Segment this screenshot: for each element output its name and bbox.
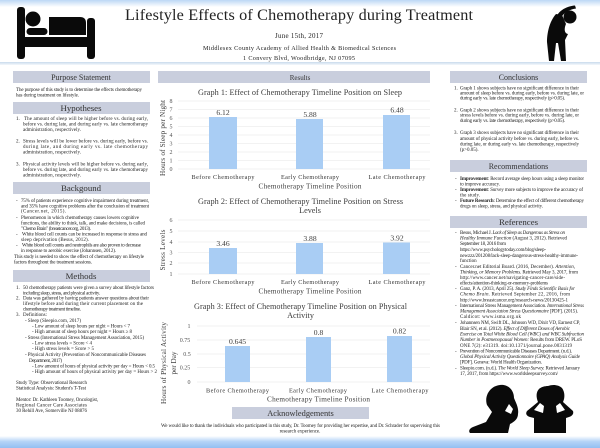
- chart: graph 2 stress: 3.46: [216, 239, 230, 248]
- text: references list: [455, 231, 584, 377]
- text: background list: functions, the ability to think, talk, and make decisions, is called: [21, 222, 146, 226]
- text: methods list: - Physical Activity (Prevention of Noncommunicable Diseases: [25, 353, 146, 358]
- chart: graph 1 sleep: 1: [170, 158, 172, 164]
- chart: graph 3 physical activity: Before Chemotherapy: [206, 388, 270, 394]
- chart: graph 3 physical activity: Early Chemotherapy: [289, 388, 348, 394]
- text: conclusions list: [454, 86, 584, 153]
- heading: methods: [13, 270, 150, 282]
- text: methods list: including sleep, stress, and physical activity.: [23, 292, 100, 296]
- panel: background: [13, 182, 150, 266]
- text: references list: 17, 2017, from https://www.worldsleepsurvey.com/: [460, 372, 559, 377]
- chart: graph 3 physical activity: per Day: [170, 351, 178, 374]
- text: conclusions list: Graph 2 shows subjects have no significant difference in their: [460, 108, 579, 114]
- text: background list: and 35% have cognitive problems after the conclusion of treatment: [21, 204, 150, 210]
- text: conclusions list: during late, or during early vs. late chemotherapy, respectively: [460, 142, 580, 148]
- chart: graph 2 stress: Graph 2: Effect of Chemotherapy Timeline Position on Stress: [198, 197, 403, 206]
- text: methods list: 3.: [16, 313, 20, 318]
- heading: acknowledgements: [232, 407, 369, 419]
- text: references list: Blair SN, et al. (2012). Effect of Different Doses of Aerobic: [460, 327, 571, 332]
- text: conclusions list: amount of sleep before vs. during early, before vs. during late, or: [460, 92, 584, 96]
- text: references list: [PDF]. Geneva: World Health Organization.: [460, 360, 542, 366]
- text: references list: -: [455, 321, 457, 326]
- chart: graph 1 sleep: Before Chemotherapy: [192, 174, 255, 181]
- text: methods list: lifestyle before and during their current placement on the: [23, 302, 144, 307]
- chart: graph 1 sleep: 6: [170, 116, 172, 122]
- chart: graph 3 physical activity: Chemotherapy Timeline Position: [267, 396, 370, 404]
- chart: graph 1 sleep: Late Chemotherapy: [368, 174, 426, 181]
- text: references list: Chemo Brain. Retrieved September 22, 2016, from: [460, 292, 570, 298]
- chart: graph 1 sleep: 4: [170, 133, 172, 139]
- text: references list: Johannsen NM, Swift DL, Johnson WD, Dixit VD, Earnest CP,: [460, 321, 580, 326]
- panel: recommendations: [450, 160, 587, 210]
- chart: graph 3 physical activity: [160, 302, 430, 404]
- chart: graph 1 sleep: 5: [170, 124, 172, 130]
- text: methods list: Mentor: Dr. Kathleen Toomey, Oncologist,: [16, 398, 98, 403]
- chart: graph 1 sleep: Graph 1: Effect of Chemotherapy Timeline Position on Sleep: [198, 88, 402, 97]
- text: recommendations list: Improvement: Survey more subjects to improve the accuracy of: [460, 188, 583, 193]
- text: conclusions list: during early vs. late chemotherapy, respectively (p>0.05).: [460, 96, 565, 102]
- text: methods list: chemotherapy treatment timeline.: [23, 308, 81, 312]
- text: hypotheses list: Physical activity levels will be higher before vs. during early,: [23, 162, 148, 168]
- text: hypotheses list: before vs. during late, and during early vs. late chemotherapy: [23, 122, 148, 128]
- text: hypotheses list: 1.: [16, 117, 20, 122]
- text: hypotheses list: 3.: [16, 162, 20, 168]
- text: background list: [14, 199, 150, 266]
- chart: graph 2 stress: Stress Levels: [159, 229, 167, 270]
- text: background list: sleep deprivation (Besus, 2012).: [21, 238, 89, 243]
- chart: graph 1 sleep: 6.48: [390, 106, 404, 114]
- text: background list: -: [16, 216, 18, 221]
- text: references list: -: [455, 231, 457, 236]
- text: methods list: - High amount of sleep hours per night = Hours ≥ 8: [32, 330, 132, 335]
- institution: Middlesex County Academy of Allied Health & Biomedical Sciences: [203, 45, 397, 52]
- text: background list: White blood cell counts can be increased in response to stress and: [22, 232, 148, 238]
- heading: acknowledgements: Acknowledgements: [267, 409, 334, 418]
- chart: graph 3 physical activity: 0.75: [180, 338, 190, 344]
- text: references list: Ganz, P. A. (2013, April 25). Study Finds Scientific Basis for: [460, 287, 575, 292]
- heading: background: Backgound: [61, 183, 102, 193]
- text: references list: Caldicot: www.isma.org.uk: [460, 315, 522, 320]
- chart: graph 2 stress: 3.92: [390, 234, 404, 242]
- text: hypotheses list: Stress levels will be lower before vs. during early, before vs.: [23, 140, 148, 144]
- institution: 1 Convery Blvd, Woodbridge, NJ 07095: [243, 55, 355, 62]
- chart: graph 1 sleep: 0: [170, 167, 172, 173]
- panel: hypotheses: [13, 102, 150, 178]
- chart: graph 3 physical activity: 0.25: [180, 366, 190, 372]
- text: acknowledgements: We would like to thank the individuals who participated in this study, Dr. Toomey for providing her expertise, and Dr. Schrader for supervising this: [161, 424, 440, 429]
- date: June 15th, 2017: [275, 32, 324, 40]
- text: methods list: Regional Cancer Care Associates: [16, 404, 87, 408]
- heading: purpose statement: Purpose Statement: [51, 73, 112, 82]
- chart: graph 1 sleep: 2: [170, 150, 172, 156]
- text: methods list: 1.: [16, 286, 20, 291]
- chart: graph 2 stress: 2: [170, 261, 172, 267]
- text: hypotheses list: The amount of sleep will be higher before vs. during early,: [24, 117, 148, 122]
- icon: bed: [17, 7, 95, 59]
- text: recommendations list: the study.: [460, 194, 480, 198]
- heading: references: [450, 216, 587, 228]
- text: references list: -: [455, 287, 457, 292]
- chart: graph 1 sleep: 3: [170, 142, 172, 148]
- chart: graph 1 sleep: 8: [170, 99, 172, 105]
- text: references list: -: [455, 265, 457, 270]
- text: background list: 75% of patients experience cognitive impairment during treatment,: [21, 199, 149, 204]
- text: recommendations list: [455, 177, 584, 210]
- text: acknowledgements: [161, 424, 440, 434]
- text: references list: effects/attention-thinking-or-memory-problems: [460, 282, 548, 286]
- text: references list: function: [460, 259, 477, 264]
- chart: graph 3 physical activity: Graph 3: Effect of Chemotherapy Timeline Position on Physical: [194, 302, 408, 311]
- text: references list: http://www.cancer.net/navigating-cancer-care/side-: [460, 276, 565, 281]
- chart: graph 3 physical activity: 1: [188, 324, 190, 330]
- text: hypotheses list: administration, respectively.: [23, 128, 81, 133]
- text: acknowledgements: research experience.: [280, 430, 320, 434]
- text: background list: -: [16, 244, 18, 248]
- text: references list: Prevention of Noncommunicable Diseases Department. (n.d.).: [460, 350, 572, 354]
- text: methods list: - Low amount of hours of physical activity per day = Hours < 0.5: [32, 364, 156, 370]
- text: references list: -: [455, 366, 457, 372]
- text: background list: -: [16, 232, 18, 238]
- text: methods list: 50 chemotherapy patients were given a survey about lifestyle factors: [23, 286, 154, 291]
- chart: graph 2 stress: Late Chemotherapy: [368, 279, 426, 286]
- text: methods list: Statistical Analysis: Student's T-Test: [16, 386, 87, 392]
- text: background list: (Cancer.net, 2015).: [21, 210, 66, 214]
- text: conclusions list: Graph 1 shows subjects have no significant difference in their: [460, 86, 579, 92]
- chart: graph 1 sleep: [159, 88, 430, 190]
- text: recommendations list: -: [455, 177, 457, 182]
- chart: graph 1 sleep: Early Chemotherapy: [281, 174, 340, 181]
- text: conclusions list: 2.: [454, 108, 458, 114]
- chart: graph 1 sleep: 5.88: [303, 110, 317, 119]
- text: hypotheses list: administration, respectively.: [23, 174, 81, 178]
- chart: graph 2 stress: 3.88: [303, 234, 317, 243]
- text: conclusions list: Graph 3 shows subjects have no significant difference in their: [460, 131, 579, 136]
- text: methods list: Definitions:: [23, 313, 47, 318]
- chart: graph 2 stress: 1: [170, 272, 172, 278]
- text: references list: Cancer.net Editorial Board. (2016, December). Attention,: [460, 265, 575, 270]
- chart: graph 2 stress: Chemotherapy Timeline Position: [258, 288, 362, 296]
- chart: graph 3 physical activity: Hours of Physical Activity: [160, 322, 168, 404]
- chart: graph 2 stress: 4: [170, 240, 172, 246]
- text: conclusions list: amount of physical activity before vs. during early, before vs.: [460, 137, 579, 142]
- text: methods list: Study Type: Observational Research: [16, 381, 88, 386]
- text: background list: -: [16, 199, 18, 204]
- text: references list: Healthy Immune Function (August 3, 2012). Retrieved: [459, 236, 568, 242]
- text: recommendations list: Future Research: Determine the effect of different chemotherapy: [460, 199, 584, 204]
- text: methods list: - Sleep (Sleepio.com, 2017): [25, 319, 81, 324]
- chart: graph 3 physical activity: Activity: [287, 311, 315, 320]
- panel: conclusions: [450, 71, 587, 153]
- panel: acknowledgements: [161, 407, 440, 434]
- text: hypotheses list: 2.: [16, 140, 20, 144]
- text: references list: https://www.psychologytoday.com/blog/sleep-: [460, 248, 546, 253]
- chart: graph 3 physical activity: 0.5: [183, 352, 191, 358]
- chart: graph 1 sleep: Chemotherapy Timeline Position: [258, 182, 362, 190]
- text: conclusions list: during early vs. late chemotherapy, respectively (p>0.05).: [460, 119, 565, 124]
- panel: purpose statement: [13, 71, 150, 98]
- text: hypotheses list: administration, respectively.: [23, 150, 81, 156]
- text: conclusions list: stress levels before vs. during early, before vs. during late, or: [460, 114, 579, 118]
- chart: graph 2 stress: Levels: [299, 206, 321, 215]
- heading: conclusions: Conclusions: [499, 73, 538, 82]
- heading: methods: Methods: [66, 271, 97, 281]
- text: background list: This study is needed to show the effect of chemotherapy on lifestyle: [14, 255, 145, 260]
- text: recommendations list: -: [455, 188, 457, 193]
- heading: references: References: [499, 217, 539, 227]
- chart: graph 3 physical activity: 0.645: [229, 337, 246, 346]
- chart: graph 2 stress: 3: [170, 250, 172, 256]
- text: methods list: 30 Rehill Ave, Somerville NJ 08876: [16, 409, 88, 414]
- text: background list: "Chemo Brain" (breastcancer.org, 2013).: [21, 227, 91, 232]
- chart: graph 1 sleep: Hours of Sleep per Night: [159, 100, 167, 176]
- text: references list: Number in Postmenopausal Women: Results from DREW. PLoS: [459, 338, 582, 343]
- text: recommendations list: Improvement: Record average sleep hours using a sleep monitor: [460, 177, 584, 182]
- chart: graph 3 physical activity: 0: [188, 380, 190, 386]
- text: methods list: Department, 2017): [29, 359, 62, 364]
- text: conclusions list: 3.: [454, 131, 458, 136]
- text: references list: Exercise on Total White Blood Cell (WBC) and WBC Subfraction: [459, 332, 584, 338]
- text: references list: Global Physical Activity Questionnaire (GPAQ) Analysis Guide: [460, 355, 581, 360]
- text: hypotheses list: [16, 117, 148, 178]
- chart: graph 3 physical activity: 0.8: [314, 328, 323, 337]
- icon: person bending: [547, 6, 576, 61]
- text: background list: Phenomenon in which chemotherapy causes lowers cognitive: [21, 216, 140, 221]
- title: Lifestyle Effects of Chemotherapy during Treatment: [125, 6, 474, 24]
- text: references list: -: [455, 304, 457, 309]
- heading: results: Results: [290, 74, 311, 82]
- text: purpose statement: has during treatment on lifestyle.: [16, 94, 79, 98]
- chart: graph 2 stress: 5: [170, 229, 172, 235]
- institution: [203, 45, 397, 62]
- text: purpose statement: The purpose of this study is to determine the effects chemotherapy: [16, 88, 142, 93]
- text: references list: Besus, Michael J. Lack of Sleep as Dangerous as Stress on: [460, 231, 566, 236]
- text: references list: Sleepio.com. (n.d.). The World Sleep Survey. Retrieved January: [460, 366, 580, 372]
- icon: stressed man silhouette: [526, 385, 573, 433]
- text: conclusions list: (p>0.05).: [460, 148, 479, 153]
- text: background list: White blood cell counts and neutrophils are also proven to decrease: [22, 244, 142, 248]
- text: hypotheses list: before vs. during late, and during early vs. late chemotherapy: [23, 168, 148, 173]
- chart: graph 3 physical activity: Late Chemotherapy: [372, 388, 429, 394]
- chart: graph 2 stress: Before Chemotherapy: [192, 279, 255, 286]
- chart: graph 2 stress: Early Chemotherapy: [281, 279, 340, 286]
- heading: recommendations: Recommendations: [489, 162, 548, 171]
- chart: graph 2 stress: 6: [170, 218, 172, 224]
- heading: hypotheses: Hypotheses: [60, 103, 102, 113]
- text: references list: September 18, 2016 from: [460, 242, 506, 247]
- text: references list: Thinking, or Memory Problems. Retrieved May 3, 2017, from: [460, 270, 578, 276]
- text: methods list: 2.: [16, 296, 20, 302]
- text: references list: International Stress Management Association. International Stress: [460, 304, 584, 309]
- panel: methods: [13, 270, 158, 414]
- panel: references: [450, 216, 587, 377]
- heading: results: [158, 71, 430, 83]
- text: references list: newzzz/201208/lack-sleep-dangerous-stress-healthy-immune-: [460, 254, 578, 259]
- text: methods list: [16, 286, 158, 414]
- chart: graph 1 sleep: 7: [170, 108, 172, 114]
- text: methods list: - High amount of hours of physical activity per day = Hours > 2: [32, 370, 158, 375]
- text: references list: Management Association Stress Questionnaire [PDF]. (2015).: [459, 310, 578, 314]
- text: recommendations list: -: [455, 199, 457, 204]
- text: background list: factors throughout the treatment sessions.: [14, 260, 92, 266]
- text: recommendations list: to improve accuracy.: [460, 182, 500, 188]
- text: recommendations list: drugs on sleep, stress, and physical activity.: [460, 204, 543, 210]
- text: hypotheses list: during late, and during early vs. late chemotherapy: [23, 145, 148, 150]
- chart: graph 1 sleep: 6.12: [216, 108, 230, 117]
- text: references list: http://www.breastcancer.org/research-news/20130425-1: [460, 298, 568, 304]
- text: methods list: - Low stress levels = Score < 4: [32, 342, 92, 346]
- text: methods list: - Stress (International Stress Management Association, 2015): [25, 336, 144, 341]
- chart: graph 3 physical activity: 0.82: [393, 326, 406, 336]
- icon: stressed woman silhouette: [469, 385, 518, 433]
- text: purpose statement: [16, 88, 142, 98]
- text: background list: in response to aerobic exercise (Johannsen, 2012).: [21, 249, 116, 254]
- text: methods list: - Low amount of sleep hours per night = Hours < 7: [32, 324, 130, 330]
- text: conclusions list: 1.: [454, 86, 458, 92]
- text: methods list: - High stress levels = Score > 5: [32, 347, 94, 352]
- text: references list: ONE 7(2): e31319. doi:10.1371/journal.pone.0031319: [460, 344, 572, 349]
- text: methods list: Data was gathered by having patients answer questions about their: [23, 296, 149, 302]
- text: references list: -: [455, 350, 457, 354]
- chart: graph 2 stress: [159, 197, 430, 296]
